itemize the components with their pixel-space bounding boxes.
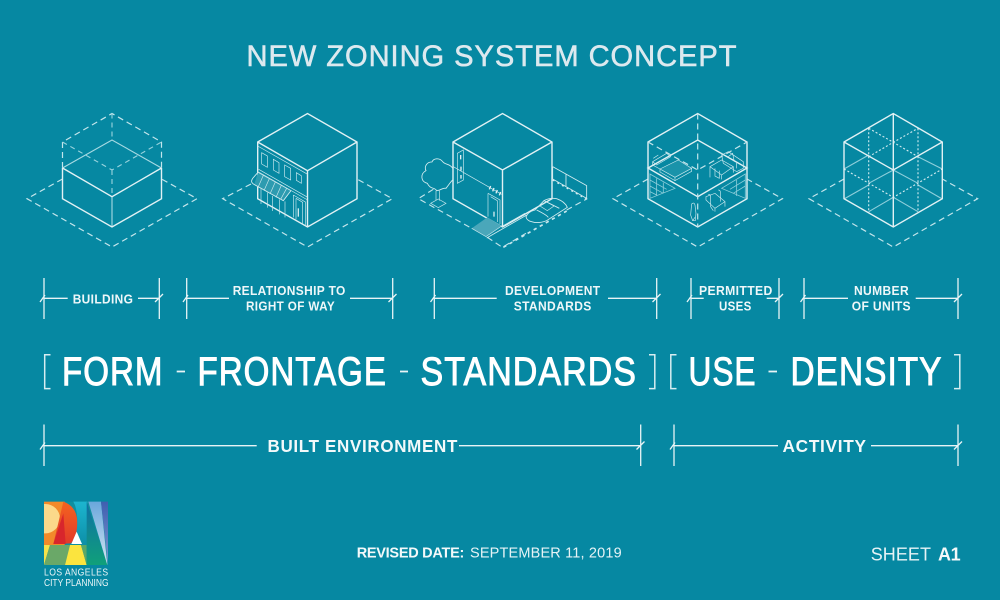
solid cube (258, 114, 357, 227)
icon: development standards site (418, 114, 587, 247)
formula: form frontage standards (45, 350, 655, 394)
dimension: development standards (430, 278, 660, 319)
dimension: relationship to right of way: RELATIONSHIP TO (233, 283, 346, 298)
solid massing box (62, 168, 162, 227)
shop facade details (252, 146, 308, 225)
solid cube (844, 114, 942, 227)
formula: use density: DENSITY (790, 350, 942, 394)
site details (418, 150, 587, 247)
icon: storefront frontage (223, 114, 392, 247)
revised date: REVISED DATE: (357, 546, 464, 562)
dimension: development standards: DEVELOPMENT (505, 283, 600, 298)
crosswalk (472, 217, 502, 237)
ground plane (809, 179, 978, 247)
dotted dividers (844, 128, 942, 212)
dimension: number of units (800, 278, 962, 319)
tree (422, 159, 453, 191)
dimension: relationship to right of way (183, 278, 396, 319)
dimension: number of units: OF UNITS (852, 299, 911, 314)
desk and sofa (710, 160, 733, 179)
street edge (503, 211, 567, 247)
revised date (357, 546, 622, 562)
dimension: built environment (40, 424, 644, 466)
faint unit grid (844, 155, 942, 212)
logo: Los Angeles City Planning: CITY PLANNING (44, 578, 109, 589)
formula: form frontage standards: STANDARDS (420, 350, 637, 394)
formula: form frontage standards: FRONTAGE (198, 350, 387, 394)
icon: building form massing (27, 114, 197, 247)
formula: use density: USE (688, 350, 756, 394)
dimension: permitted uses: PERMITTED (699, 283, 773, 298)
sign and facade (453, 150, 502, 194)
formula: form frontage standards: FORM (62, 350, 164, 394)
dashed envelope (62, 114, 162, 168)
sidewalk (487, 213, 527, 238)
logo wordmark: LOS ANGELES (44, 568, 108, 578)
solid cube (453, 114, 552, 227)
furniture (653, 152, 743, 221)
ground plane (418, 189, 587, 247)
dimension: activity (670, 424, 962, 466)
bed (660, 160, 692, 177)
ground plane (223, 179, 392, 247)
logo: Los Angeles City Planning (44, 502, 109, 589)
people and table (691, 203, 696, 221)
dimension: development standards: STANDARDS (514, 299, 592, 314)
logo mark (44, 502, 108, 565)
dimension: relationship to right of way: RIGHT OF WAY (246, 299, 335, 314)
dimension: building (40, 278, 163, 319)
dimension: activity: ACTIVITY (782, 436, 867, 456)
dimension: permitted uses (687, 278, 783, 319)
sheet number: SHEET (871, 544, 931, 564)
ground plane (613, 179, 782, 247)
dashed centre lines (648, 114, 747, 227)
icon: number of units grid (809, 114, 978, 247)
title: NEW ZONING SYSTEM CONCEPT (246, 40, 738, 73)
formula: use density (671, 350, 960, 394)
icon: permitted uses interior (613, 114, 782, 247)
cube and mid floor (648, 114, 747, 227)
faint hidden edges (62, 114, 162, 196)
massing back edges (62, 140, 162, 227)
ground plane (27, 179, 197, 247)
brick wall hatching (650, 174, 745, 198)
dimension: number of units: NUMBER (854, 283, 909, 298)
dimension: building: BUILDING (73, 291, 133, 306)
sheet number (871, 544, 961, 564)
dimension: permitted uses: USES (719, 299, 752, 314)
dimension: built environment: BUILT ENVIRONMENT (268, 436, 458, 456)
fence (553, 167, 587, 198)
car (526, 198, 567, 223)
sheet number: A1 (938, 544, 961, 564)
revised date: SEPTEMBER 11, 2019 (470, 546, 622, 562)
